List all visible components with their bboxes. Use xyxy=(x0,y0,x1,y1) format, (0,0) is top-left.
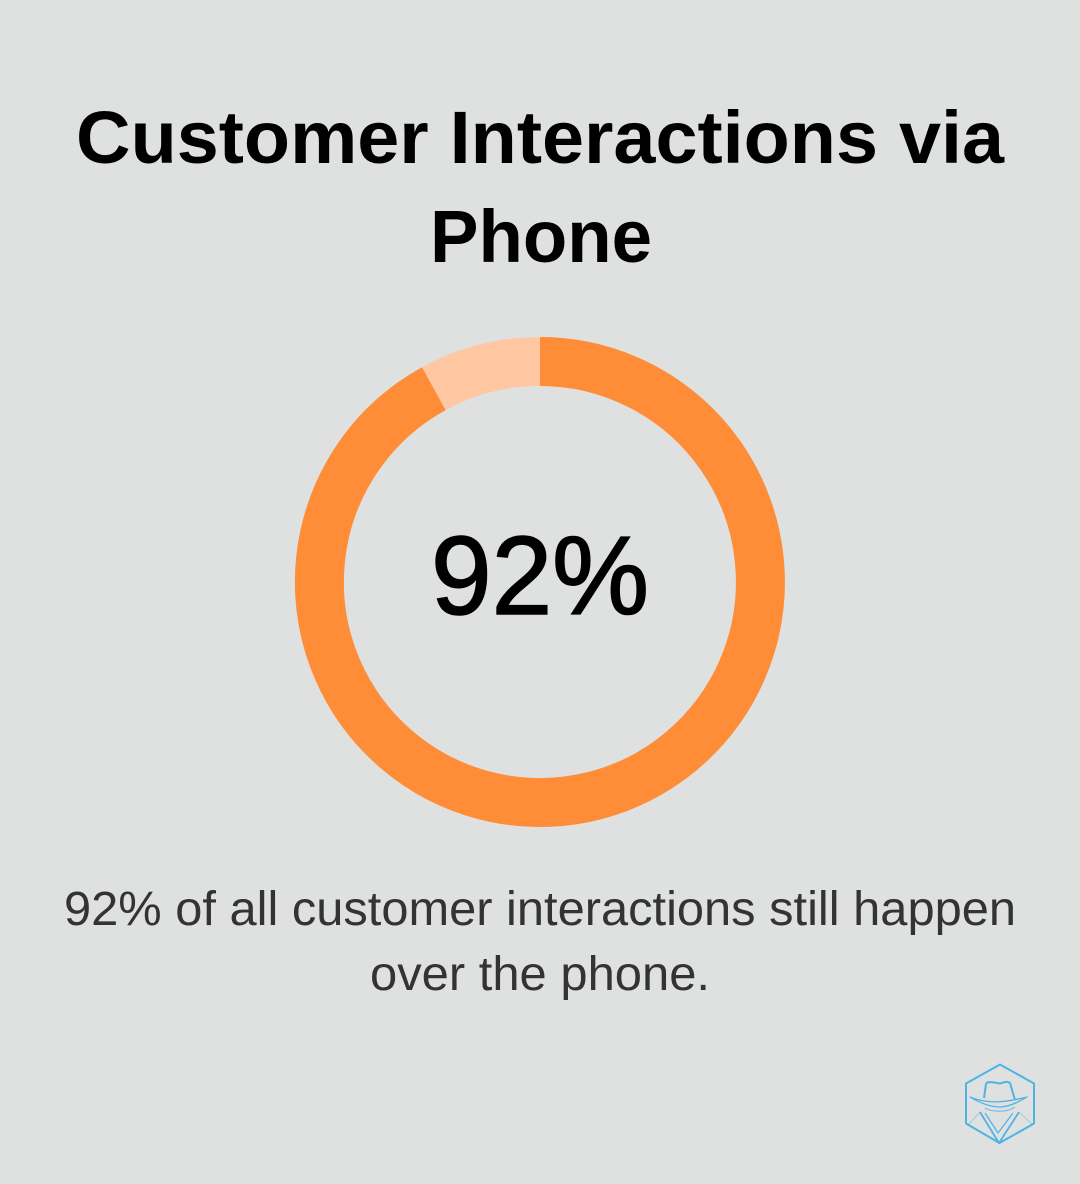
title: Phone xyxy=(430,195,652,278)
icon: logo hexagon with hat figure xyxy=(966,1064,1034,1143)
remaining 8 percent segment xyxy=(434,361,540,389)
92 percent segment xyxy=(319,362,760,802)
donut chart: 92 percent xyxy=(319,361,760,802)
title xyxy=(76,96,1005,278)
description text xyxy=(64,883,1016,1001)
description text: 92% of all customer interactions still happen xyxy=(64,883,1016,936)
donut value: 92% xyxy=(431,514,649,638)
description text: over the phone. xyxy=(370,948,710,1001)
title: Customer Interactions via xyxy=(76,96,1005,179)
